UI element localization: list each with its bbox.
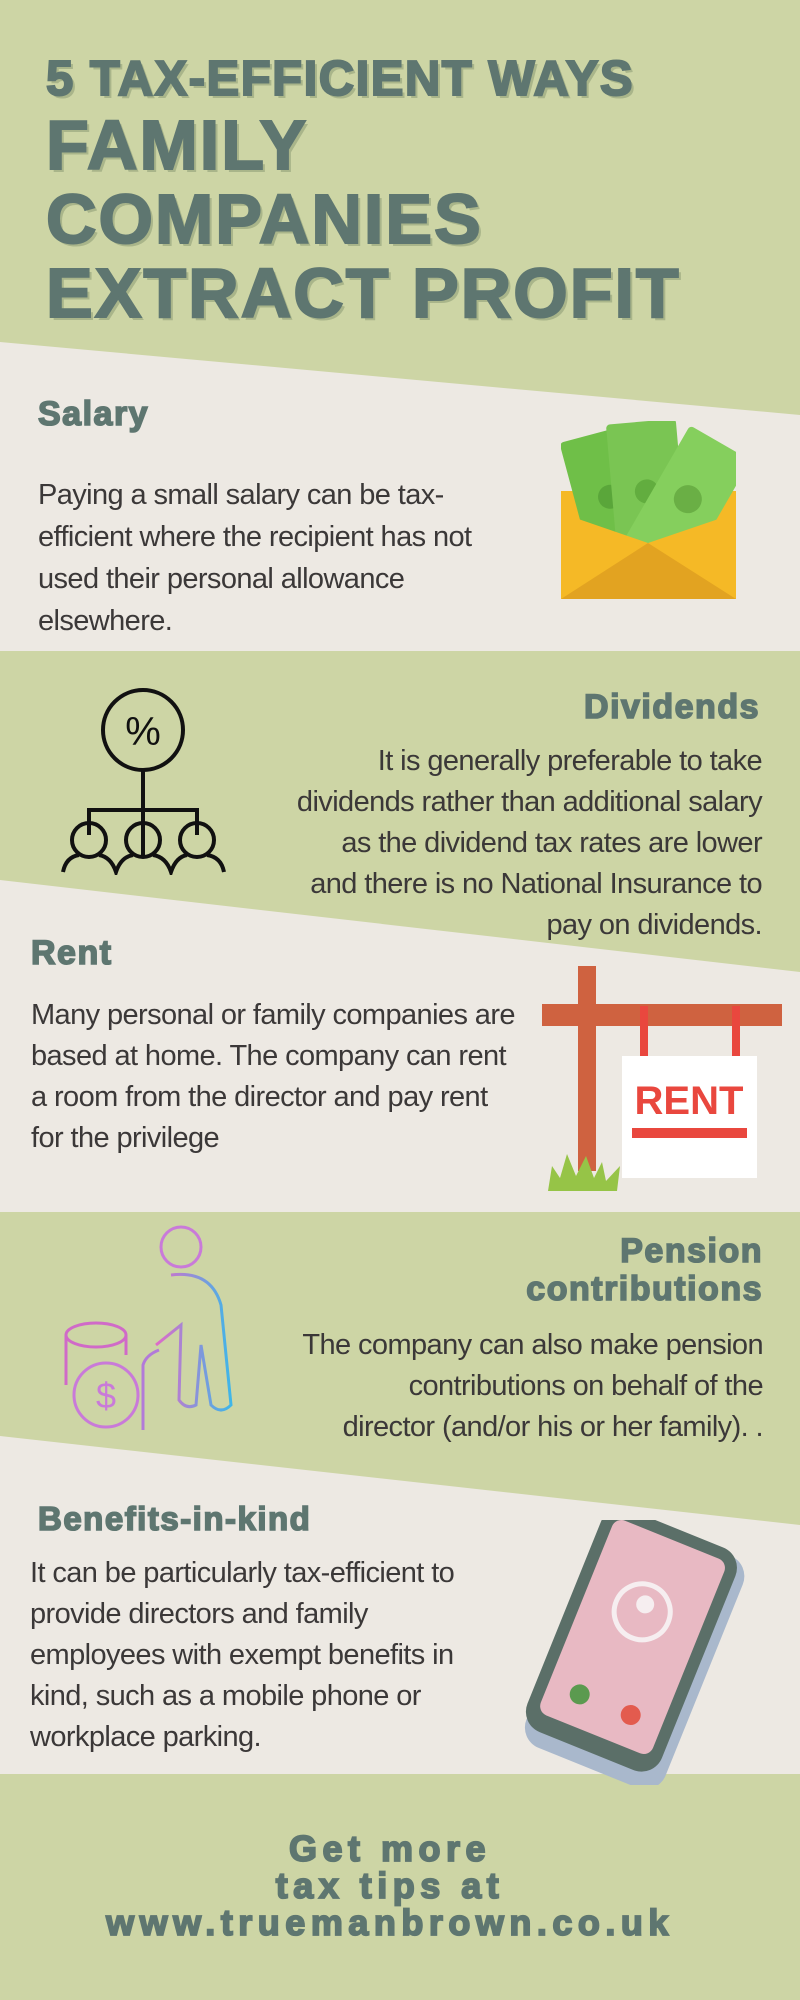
text: benefits: workplace parking. [30,1721,261,1753]
text: rent: Many personal or family companies are [31,999,515,1031]
text: dividends: dividends rather than additional salary [297,786,762,818]
title: EXTRACT PROFIT [46,254,681,332]
icon: elderly person with coins [64,1226,232,1430]
title: FAMILY [46,106,308,184]
text: salary: Paying a small salary can be tax- [38,479,444,511]
footer: call to action: Get more [289,1828,491,1869]
icon: money envelope [561,421,736,599]
title: 5 TAX-EFFICIENT WAYS [46,52,634,106]
heading: benefits-in-kind: Benefits-in-kind [38,1500,311,1537]
heading: rent: Rent [31,934,113,972]
footer: call to action [104,1828,674,1943]
text: dividends: It is generally preferable to take [378,745,762,777]
icon: rent sign: RENT [635,1079,743,1123]
heading: pension contributions [526,1232,763,1308]
text: pension [302,1329,763,1443]
text: benefits: It can be particularly tax-efficient to [30,1557,454,1589]
heading: salary: Salary [38,395,149,433]
heading: dividends: Dividends [584,688,760,726]
text: rent [31,999,515,1154]
text: salary: elsewhere. [38,605,172,637]
footer: call to action: tax tips at [276,1865,504,1906]
text: benefits: provide directors and family [30,1598,368,1630]
text: salary: used their personal allowance [38,563,404,595]
icon: mobile phone [524,1520,744,1785]
icon: percent network: % [125,710,161,754]
text: benefits: kind, such as a mobile phone or [30,1680,421,1712]
icon: rent sign [542,966,782,1191]
text: rent: based at home. The company can rent [31,1040,506,1072]
panel: pension [64,1226,763,1443]
title: COMPANIES [46,180,483,258]
icon: elderly person with coins: $ [96,1375,116,1416]
icon: percent network [61,688,226,875]
panel: dividends [61,688,762,941]
text: pension: director (and/or his or her family). . [343,1411,763,1443]
text: pension: contributions on behalf of the [409,1370,763,1402]
text: dividends [297,745,762,941]
text: salary [38,479,472,637]
text: pension: The company can also make pension [302,1329,763,1361]
text: dividends: pay on dividends. [546,909,762,941]
title [46,52,681,332]
text: dividends: and there is no National Insurance to [310,868,762,900]
text: benefits: employees with exempt benefits in [30,1639,453,1671]
heading: pension contributions: Pension [620,1232,763,1270]
panel: benefits-in-kind [30,1500,744,1785]
text: rent: a room from the director and pay rent [31,1081,488,1113]
panel: rent [31,934,782,1191]
text: benefits [30,1557,454,1753]
text: rent: for the privilege [31,1122,219,1154]
footer: call to action: www.truemanbrown.co.uk [106,1902,674,1943]
text: dividends: as the dividend tax rates are lower [341,827,762,859]
text: salary: efficient where the recipient has not [38,521,472,553]
heading: pension contributions: contributions [526,1270,763,1308]
panel: salary [38,395,736,637]
